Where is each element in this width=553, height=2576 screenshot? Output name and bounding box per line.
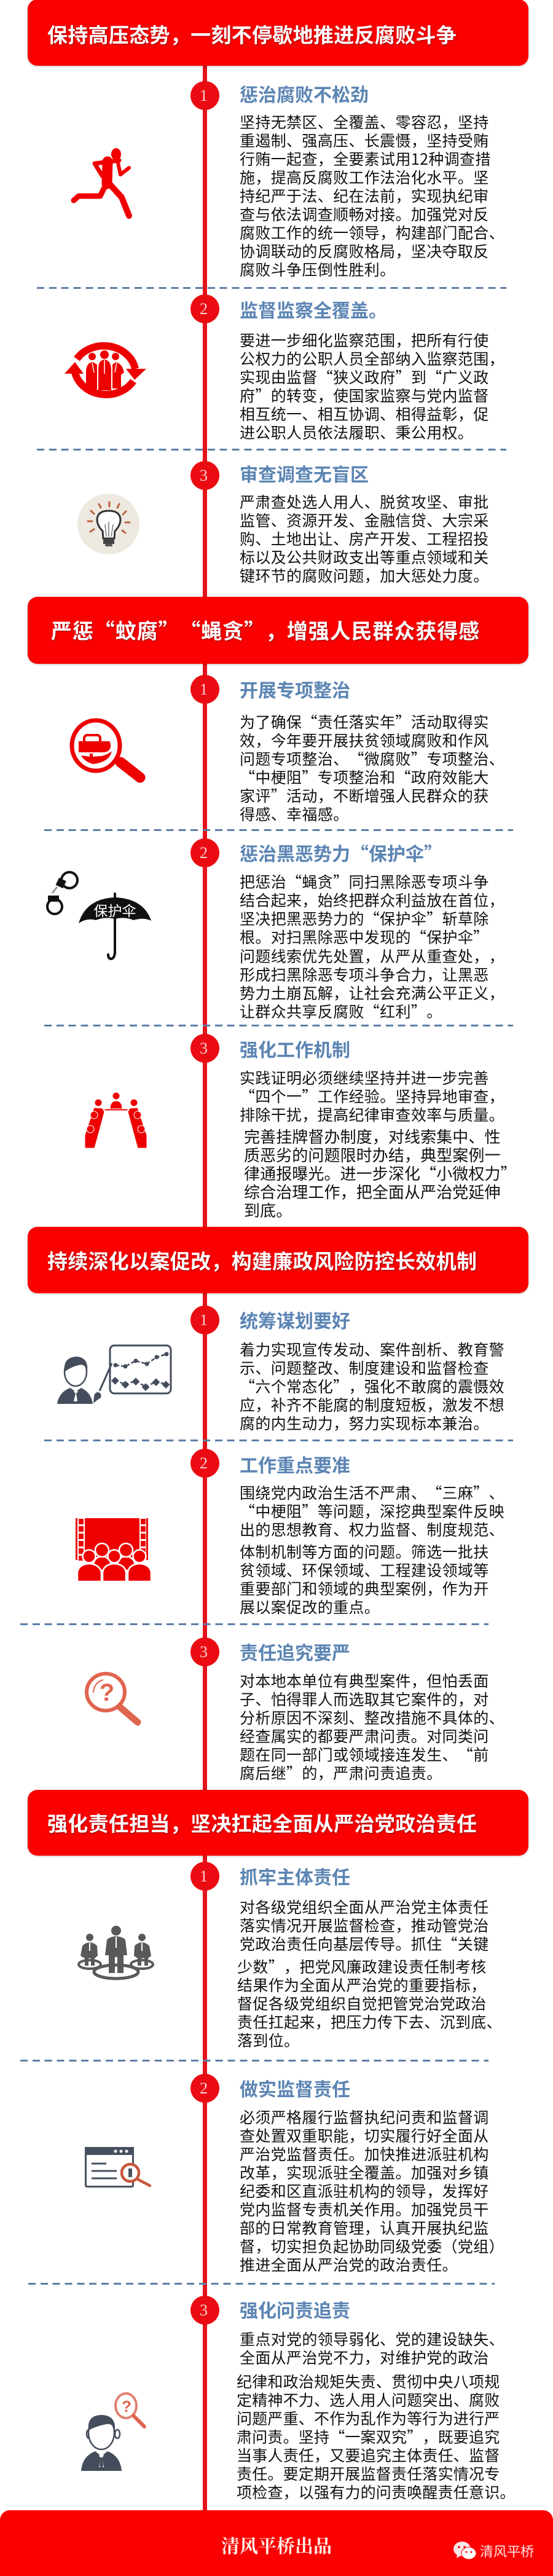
body text part 2: 贫领域、环保领域、工程建设领域等	[240, 1559, 489, 1581]
panel: 惩治腐败不松劲	[71, 80, 504, 280]
body text: 严治党监督责任。加快推进派驻机构	[240, 2143, 489, 2165]
body text: 结合起来，始终把群众利益放在首位，	[240, 889, 504, 911]
heading: 惩治腐败不松劲	[240, 80, 369, 107]
body text	[240, 490, 489, 586]
body text: 协调联动的反腐败格局，坚决夺取反	[240, 240, 489, 262]
body text: 行贿一起查，全要素试用12种调查措	[240, 148, 491, 170]
heading: 惩治黑恶势力“保护伞”	[240, 839, 442, 866]
panel: 强化问责追责	[81, 2296, 516, 2503]
panel: 统筹谋划要好	[57, 1306, 504, 1434]
body text part 2: 展以案促改的重点。	[240, 1596, 380, 1618]
heading: 做实监督责任	[240, 2074, 350, 2101]
body text	[240, 1338, 504, 1434]
body text: 示、问题整改、制度建设和监督检查	[240, 1357, 489, 1379]
body text: 重遏制、强高压、长震慑，坚持受贿	[240, 129, 489, 151]
panel: 惩治黑恶势力“保护伞”	[46, 838, 504, 1022]
body text part 2: 少数”，把党风廉政建设责任制考核	[237, 1955, 487, 1977]
body text: 腐败工作的统一领导，构建部门配合、	[240, 221, 504, 243]
body text: 实现由监督“狭义政府”到“广义政	[240, 366, 489, 388]
icon: document with magnifier	[85, 2147, 151, 2188]
icon: magnifier with question mark	[85, 1672, 141, 1726]
body text: 让群众共享反腐败“红利”。	[240, 1000, 442, 1022]
body text: 坚持无禁区、全覆盖、零容忍，坚持	[240, 111, 489, 133]
body text: 必须严格履行监督执纪问责和监督调	[240, 2106, 489, 2128]
icon: magnifier with question mark: ?	[100, 1679, 114, 1706]
body text: 着力实现宣传发动、案件剖析、教育警	[240, 1338, 504, 1360]
body text: 键环节的腐败问题，加大惩处力度。	[240, 564, 489, 586]
icon: man with question magnifier: ?	[122, 2397, 131, 2416]
icon: cinema audience	[76, 1518, 151, 1581]
icon: man with question magnifier	[81, 2392, 146, 2471]
icon: conference table	[85, 1093, 146, 1148]
step number 2: 2	[200, 300, 208, 317]
section header 4	[28, 1790, 528, 1856]
step number 2: 2	[200, 2079, 208, 2097]
panel: 开展专项整治	[70, 675, 504, 825]
body text part 1	[240, 1066, 504, 1125]
body text: 家评”活动，不断增强人民群众的获	[240, 784, 489, 806]
body text part 2: 责任扛起来，把压力传下去、沉到底、	[237, 2011, 502, 2033]
icon: running man	[71, 148, 132, 219]
body text: 坚决把黑恶势力的“保护伞”斩草除	[240, 907, 489, 929]
body text part 2	[237, 1955, 502, 2051]
body text: 相互统一、相互协调、相得益彰，促	[240, 403, 489, 425]
step number 3: 3	[200, 1642, 208, 1661]
icon: light bulb	[77, 494, 139, 554]
body text: 严肃查处选人用人、脱贫攻坚、审批	[240, 490, 489, 513]
body text: 为了确保“责任落实年”活动取得实	[240, 711, 489, 733]
section header 1: 保持高压态势，一刻不停歇地推进反腐败斗争	[47, 19, 457, 49]
heading: 责任追究要严	[240, 1638, 350, 1665]
step number 1: 1	[200, 1310, 208, 1329]
body text part 2: 督促各级党组织自觉把管党治党政治	[237, 1992, 487, 2014]
panel: 强化工作机制	[85, 1034, 517, 1221]
icon: three leaders on platforms	[77, 1926, 154, 1980]
body text part 1: 对各级党组织全面从严治党主体责任	[240, 1896, 489, 1918]
body text part 2	[240, 1540, 489, 1618]
step number 1: 1	[200, 1867, 208, 1885]
panel: 责任追究要严	[85, 1637, 504, 1784]
body text part 2: 项检查，以强有力的问责唤醒责任意识。	[237, 2481, 516, 2503]
body text: “六个常态化”，强化不敢腐的震慑效	[240, 1375, 504, 1397]
icon: magnifier with briefcase	[70, 718, 145, 783]
body text part 2: 律通报曝光。进一步深化“小微权力”	[244, 1162, 517, 1184]
step number 2	[190, 294, 219, 323]
body text: 应，补齐不能腐的制度短板，激发不想	[240, 1393, 504, 1416]
body text part 2: 落到位。	[237, 2029, 299, 2051]
heading: 强化问责追责	[240, 2296, 350, 2323]
body text: 根。对扫黑除恶中发现的“保护伞”	[240, 926, 489, 948]
body text part 1	[240, 2328, 504, 2368]
icon: wechat	[453, 2542, 476, 2560]
icon: presenter with chart	[57, 1345, 172, 1404]
body text	[240, 329, 504, 443]
step number 3: 3	[200, 1039, 208, 1057]
heading: 抓牢主体责任	[240, 1862, 350, 1889]
body text part 1: “四个一”工作经验。坚持异地审查，	[240, 1085, 504, 1107]
body text: 查处置双重职能，切实履行好全面从	[240, 2124, 489, 2146]
step number 1	[190, 1306, 219, 1334]
body text: 要进一步细化监察范围，把所有行使	[240, 329, 489, 351]
step number 2: 2	[200, 1454, 208, 1471]
body text: 部的日常教育管理，认真开展执纪监	[240, 2216, 489, 2239]
section header 2: 严惩“蚊腐”“蝇贪”，增强人民群众获得感	[51, 615, 480, 645]
icon: people in cycle arrows	[65, 342, 146, 398]
step number 3	[190, 2295, 219, 2325]
body text: 问题专项整治、“微腐败”专项整治、	[240, 747, 504, 770]
body text part 1: 实践证明必须继续坚持并进一步完善	[240, 1066, 489, 1089]
body text part 2: 综合治理工作，把全面从严治党延伸	[244, 1180, 501, 1203]
body text: 查与依法调查顺畅对接。加强党对反	[240, 203, 489, 225]
heading: 审查调查无盲区	[240, 460, 369, 487]
step number 3	[190, 461, 219, 489]
section header 4: 强化责任担当，坚决扛起全面从严治党政治责任	[47, 1808, 477, 1837]
body text	[240, 111, 504, 280]
body text part 2: 肃问责。坚持“一案双究”，既要追究	[237, 2425, 500, 2448]
body text: 进公职人员依法履职、秉公用权。	[240, 421, 473, 443]
body text	[240, 711, 504, 825]
wechat account name: 清风平桥	[480, 2541, 534, 2561]
body text part 2: 责任。要定期开展监督责任落实情况专	[237, 2462, 500, 2484]
footer title: 清风平桥出品	[221, 2531, 332, 2558]
body text: 公权力的公职人员全部纳入监察范围，	[240, 347, 504, 369]
body text part 1: 全面从严治党不力，对维护党的政治	[240, 2346, 489, 2368]
body text: 持纪严于法、纪在法前，实现执纪审	[240, 184, 489, 207]
body text: 形成扫黑除恶专项斗争合力，让黑恶	[240, 963, 489, 985]
body text: 子、怕得罪人而选取其它案件的，对	[240, 1688, 489, 1710]
body text part 2: 问题严重、不作为乱作为等行为进行严	[237, 2407, 500, 2429]
body text part 1	[240, 1896, 489, 1955]
body text: 效，今年要开展扶贫领域腐败和作风	[240, 729, 489, 751]
step number 3	[190, 1637, 219, 1666]
body text part 1: 重点对党的领导弱化、党的建设缺失、	[240, 2328, 504, 2350]
body text: 经查属实的都要严肃问责。对同类问	[240, 1725, 489, 1747]
step number 3: 3	[200, 2301, 208, 2318]
body text: 对本地本单位有典型案件，但怕丢面	[240, 1669, 489, 1692]
body text part 1: 排除干扰，提高纪律审查效率与质量。	[240, 1103, 504, 1125]
heading: 强化工作机制	[240, 1035, 350, 1062]
body text: 标以及公共财政支出等重点领域和关	[240, 546, 489, 568]
body text part 1: 落实情况开展监督检查，推动管党治	[240, 1914, 489, 1936]
icon: handcuffs and umbrella: 保护伞	[93, 899, 136, 920]
body text: 问题线索优先处置，从严从重查处，，	[240, 945, 504, 967]
body text: 施，提高反腐败工作法治化水平。坚	[240, 166, 489, 188]
body text	[240, 2106, 504, 2275]
section header 2	[28, 597, 528, 664]
body text part 2: 质恶劣的问题限时办结，典型案例一	[244, 1143, 501, 1166]
body text part 2	[237, 2370, 516, 2503]
body text: 把惩治“蝇贪”同扫黑除恶专项斗争	[240, 870, 489, 892]
body text part 2: 完善挂牌督办制度，对线索集中、性	[244, 1125, 501, 1148]
body text: 购、土地出让、房产开发、工程招投	[240, 527, 489, 549]
panel: 抓牢主体责任	[77, 1862, 502, 2051]
body text part 2: 体制机制等方面的问题。筛选一批扶	[240, 1540, 489, 1562]
body text part 1: 党政治责任向基层传导。抓住“关键	[240, 1932, 489, 1955]
heading: 统筹谋划要好	[240, 1306, 350, 1333]
step number 3	[190, 1034, 219, 1062]
body text: 得感、幸福感。	[240, 803, 348, 825]
body text part 2: 纪律和政治规矩失责、贯彻中央八项规	[237, 2370, 500, 2392]
body text: 腐的内生动力，努力实现标本兼治。	[240, 1412, 489, 1434]
step number 1: 1	[200, 680, 208, 698]
heading: 工作重点要准	[240, 1451, 350, 1478]
step number 2: 2	[200, 843, 208, 862]
section header 3	[28, 1227, 528, 1293]
body text part 2: 结果作为全面从严治党的重要指标，	[237, 1974, 487, 1996]
step number 1	[190, 1861, 219, 1891]
step number 1	[190, 675, 219, 703]
body text part 2	[244, 1125, 517, 1221]
panel: 监督监察全覆盖	[65, 294, 504, 443]
step number 1	[190, 81, 219, 109]
body text: 改革，实现派驻全覆盖。加强对乡镇	[240, 2161, 489, 2183]
panel: 做实监督责任	[85, 2074, 504, 2275]
panel: 审查调查无盲区	[77, 460, 489, 586]
body text: 纪委和区直派驻机构的领导，发挥好	[240, 2180, 489, 2202]
body text part 2: 到底。	[244, 1199, 292, 1221]
step number 1: 1	[200, 86, 208, 104]
heading: 监督监察全覆盖。	[240, 296, 387, 323]
body text: 督，切实担负起协助同级党委（党组）	[240, 2235, 504, 2257]
body text: 府”的转变，使国家监察与党内监督	[240, 384, 489, 406]
body text: 监管、资源开发、金融信贷、大宗采	[240, 509, 489, 531]
body text part 2: 定精神不力、选人用人问题突出、腐败	[237, 2389, 500, 2411]
heading: 开展专项整治	[240, 676, 350, 703]
step number 2	[190, 1448, 219, 1478]
body text part 1: 出的思想教育、权力监督、制度规范、	[240, 1518, 504, 1540]
body text: 党内监督专责机关作用。加强党员干	[240, 2198, 489, 2220]
step number 2	[190, 2074, 219, 2102]
section header 3: 持续深化以案促改，构建廉政风险防控长效机制	[47, 1245, 477, 1275]
body text part 1: “中梗阻”等问题，深挖典型案件反映	[240, 1500, 504, 1522]
footer band	[0, 2510, 553, 2576]
section header 1	[28, 0, 528, 66]
body text: 腐败斗争压倒性胜利。	[240, 258, 396, 280]
body text: “中梗阻”专项整治和“政府效能大	[240, 766, 489, 788]
body text: 分析原因不深刻、整改措施不具体的、	[240, 1706, 504, 1728]
body text: 推进全面从严治党的政治责任。	[240, 2253, 458, 2275]
body text part 2: 当事人责任，又要追究主体责任、监督	[237, 2444, 500, 2466]
step number 2	[190, 838, 219, 867]
body text part 1	[240, 1481, 504, 1540]
body text	[240, 870, 504, 1022]
body text part 2: 重要部门和领域的典型案例，作为开	[240, 1577, 489, 1599]
icon: handcuffs and umbrella	[46, 871, 151, 960]
body text part 1: 围绕党内政治生活不严肃、“三麻”、	[240, 1481, 504, 1503]
panel: 工作重点要准	[76, 1449, 504, 1618]
body text	[240, 1669, 504, 1784]
body text: 势力土崩瓦解，让社会充满公平正义，	[240, 982, 504, 1004]
body text: 腐后继”的，严肃问责追责。	[240, 1762, 442, 1784]
step number 3: 3	[200, 466, 208, 484]
body text: 题在同一部门或领域接连发生、“前	[240, 1743, 489, 1765]
